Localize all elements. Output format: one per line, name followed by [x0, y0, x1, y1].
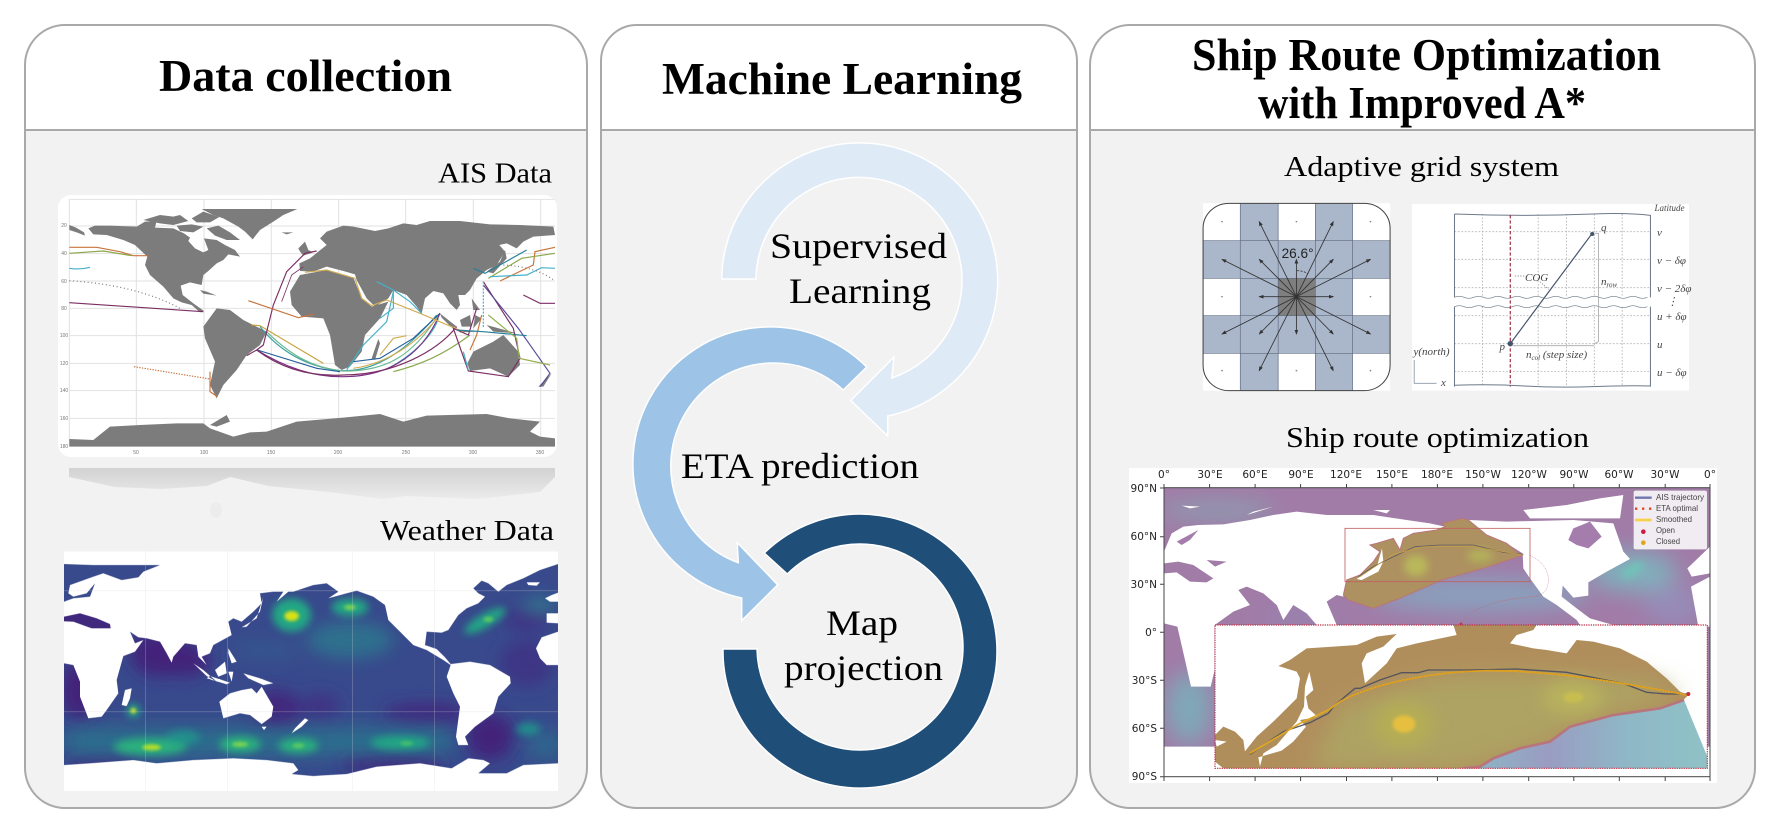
land: Eurasia — [299, 221, 555, 313]
axis labels: 150°E — [1376, 469, 1408, 481]
diagram: grid step and course over ground — [1412, 203, 1692, 391]
axis labels: 180°E — [1421, 469, 1453, 481]
land: Iceland, UK, Iberia and West Africa at the right edge — [527, 582, 558, 665]
diagram: grid step and course over ground: v − 2δφ — [1657, 283, 1692, 295]
diagram: grid step and course over ground: y(north) — [1412, 346, 1450, 358]
axis labels — [1131, 469, 1716, 783]
axis labels: 90°N — [1131, 483, 1157, 495]
label: adaptive grid system: Adaptive grid system — [1284, 152, 1559, 183]
diagram: grid step and course over ground: p — [1498, 341, 1506, 353]
axis labels: 120°W — [1511, 469, 1547, 481]
axis tick labels: 300 — [469, 450, 477, 456]
axis labels: 60°S — [1132, 723, 1157, 735]
land: South America — [203, 308, 267, 398]
axis tick labels: 250 — [402, 450, 410, 456]
arrow: ETA prediction — [633, 327, 867, 621]
AIS trajectory — [1250, 669, 1687, 754]
diagram: grid step and course over ground: COG — [1525, 272, 1548, 284]
axis frame and ticks — [1160, 484, 1710, 781]
ocean — [1463, 700, 1707, 768]
land: Arctic islands — [143, 212, 240, 296]
axis labels: 90°E — [1288, 469, 1314, 481]
axis tick labels: 120 — [60, 361, 68, 367]
panel: data collection — [25, 25, 587, 808]
reflection of AIS map — [69, 468, 555, 518]
land: Antarctica — [64, 758, 558, 786]
diagram: grid step and course over ground: u − δφ — [1657, 367, 1687, 379]
land: Antarctica — [69, 414, 555, 447]
diagram: grid step and course over ground: x — [1440, 377, 1446, 389]
text: supervised learning — [770, 226, 947, 311]
land: Eurasia, Africa and Americas — [64, 552, 558, 745]
legend labels: Closed — [1656, 536, 1680, 546]
text: map projection: Map — [826, 603, 898, 643]
land: Australia — [467, 335, 520, 377]
axis labels: 120°E — [1330, 469, 1362, 481]
land: New Zealand and Tasmania — [262, 718, 308, 733]
text: map projection: projection — [784, 648, 943, 688]
axis tick labels — [60, 223, 544, 456]
panel: ship route optimization — [1090, 25, 1755, 808]
heading: ship route optimization with improved A* — [1192, 30, 1661, 128]
axis labels: 30°W — [1650, 469, 1680, 481]
axis tick labels: 100 — [200, 450, 208, 456]
bands of strong wind in the Southern Ocean — [64, 732, 560, 753]
axis labels: 30°S — [1132, 675, 1157, 687]
text: supervised learning: Learning — [789, 271, 931, 311]
axis labels: 90°W — [1560, 469, 1589, 481]
axis tick labels: 100 — [60, 333, 68, 339]
sea: Hudson Bay and Baltic — [1177, 522, 1602, 548]
land: Philippines and Indonesia — [193, 648, 273, 685]
heading: data collection: Data collection — [159, 51, 452, 101]
diagram: 16-direction neighbourhood grid — [1203, 203, 1390, 391]
axis tick labels: 40 — [61, 251, 67, 257]
axis tick labels: 150 — [267, 450, 275, 456]
axis labels: 60°N — [1131, 531, 1157, 543]
diagram: grid step and course over ground: Latitude — [1654, 203, 1685, 213]
land: North America — [1468, 520, 1630, 625]
heading: ship route optimization with improved A*: with Improved A* — [1258, 78, 1586, 128]
diagram: grid step and course over ground: v − δφ — [1657, 255, 1686, 267]
land: Eurasia and Africa — [1164, 512, 1445, 687]
heading: ship route optimization with improved A*: Ship Route Optimization — [1192, 30, 1661, 80]
land: Australia — [219, 687, 273, 724]
diagram: grid step and course over ground: n — [1526, 349, 1532, 361]
axis labels: 0° — [1158, 469, 1170, 481]
axis labels: 60°E — [1242, 469, 1268, 481]
arrow: supervised learning — [722, 143, 998, 436]
land: West Africa and Europe — [1687, 547, 1710, 627]
diagram: grid step and course over ground: n — [1601, 276, 1606, 288]
chart: route map — [1129, 468, 1717, 783]
land: Indonesia and New Zealand — [440, 298, 552, 387]
diagram: grid step and course over ground: (step size) — [1540, 349, 1587, 361]
text: supervised learning: Supervised — [770, 226, 947, 266]
legend labels: Smoothed — [1656, 514, 1692, 524]
smoothed route — [1250, 671, 1687, 753]
label: weather data: Weather Data — [380, 516, 555, 547]
axis tick labels: 140 — [60, 388, 68, 394]
axis tick labels: 50 — [133, 450, 139, 456]
land: small coast pieces — [1215, 740, 1227, 768]
diagram: grid step and course over ground: q — [1601, 222, 1607, 234]
land: Japan and Kamchatka — [242, 592, 288, 627]
axis labels: 90°S — [1132, 771, 1157, 783]
axis tick labels: 20 — [61, 223, 67, 229]
land: Alaska tip — [69, 225, 85, 236]
diagram: grid step and course over ground: u — [1657, 339, 1663, 351]
axis labels: 0° — [1704, 469, 1716, 481]
legend labels: Open — [1656, 525, 1675, 535]
legend box — [1634, 491, 1707, 549]
sea: Mediterranean — [1164, 560, 1227, 582]
land: Japan — [487, 250, 507, 273]
label: AIS data: AIS Data — [438, 158, 553, 190]
text: map projection — [784, 603, 943, 688]
land: Antarctica strip — [1164, 747, 1710, 777]
region: search area — [1343, 518, 1522, 608]
land: Madagascar — [372, 339, 380, 360]
land: North America — [88, 221, 240, 312]
land: Madagascar — [122, 688, 132, 706]
sea: Arctic — [64, 564, 160, 602]
legend labels: AIS trajectory — [1656, 492, 1705, 502]
axis labels: 0° — [1145, 627, 1157, 639]
label: ship route optimization: Ship route optimization — [1286, 423, 1589, 454]
diagram: grid step and course over ground: col — [1532, 354, 1540, 362]
land: Africa — [290, 270, 388, 370]
legend labels: ETA optimal — [1656, 503, 1698, 513]
axis labels: 150°W — [1465, 469, 1501, 481]
land: Greenland — [202, 209, 297, 239]
axis tick labels: 180 — [60, 444, 68, 450]
text: ETA prediction: ETA prediction — [681, 446, 919, 486]
diagram: grid step and course over ground: row — [1606, 281, 1617, 289]
axis labels: 60°W — [1604, 469, 1634, 481]
axis tick labels: 200 — [334, 450, 342, 456]
axis tick labels: 160 — [60, 416, 68, 422]
axis tick labels: 350 — [536, 450, 544, 456]
region: search area — [1215, 625, 1688, 768]
diagram: grid step and course over ground: v — [1657, 227, 1662, 239]
diagram: grid step and course over ground: u + δφ — [1657, 311, 1687, 323]
panel: machine learning — [601, 25, 1077, 808]
sea: Mediterranean — [64, 613, 111, 628]
heading: machine learning: Machine Learning — [662, 54, 1022, 104]
diagram: 16-direction neighbourhood grid: 26.6° — [1282, 246, 1314, 261]
axis tick labels: 60 — [61, 279, 67, 285]
axis labels: 30°E — [1197, 469, 1223, 481]
map: weather field — [60, 552, 560, 791]
diagram: grid step and course over ground: ⋮ — [1667, 296, 1678, 308]
arrow: map projection — [723, 514, 997, 788]
axis labels: 30°N — [1131, 579, 1157, 591]
land: Japan — [1258, 672, 1317, 767]
land: Arctic islands — [1182, 495, 1623, 518]
inset: route detail — [1215, 625, 1707, 768]
axis tick labels: 80 — [61, 306, 67, 312]
legend labels — [1656, 492, 1705, 546]
map: AIS trajectories — [58, 195, 557, 457]
land: Japan on region — [1357, 548, 1383, 580]
land: Iceland and UK — [282, 232, 313, 256]
ship routes — [69, 247, 555, 397]
